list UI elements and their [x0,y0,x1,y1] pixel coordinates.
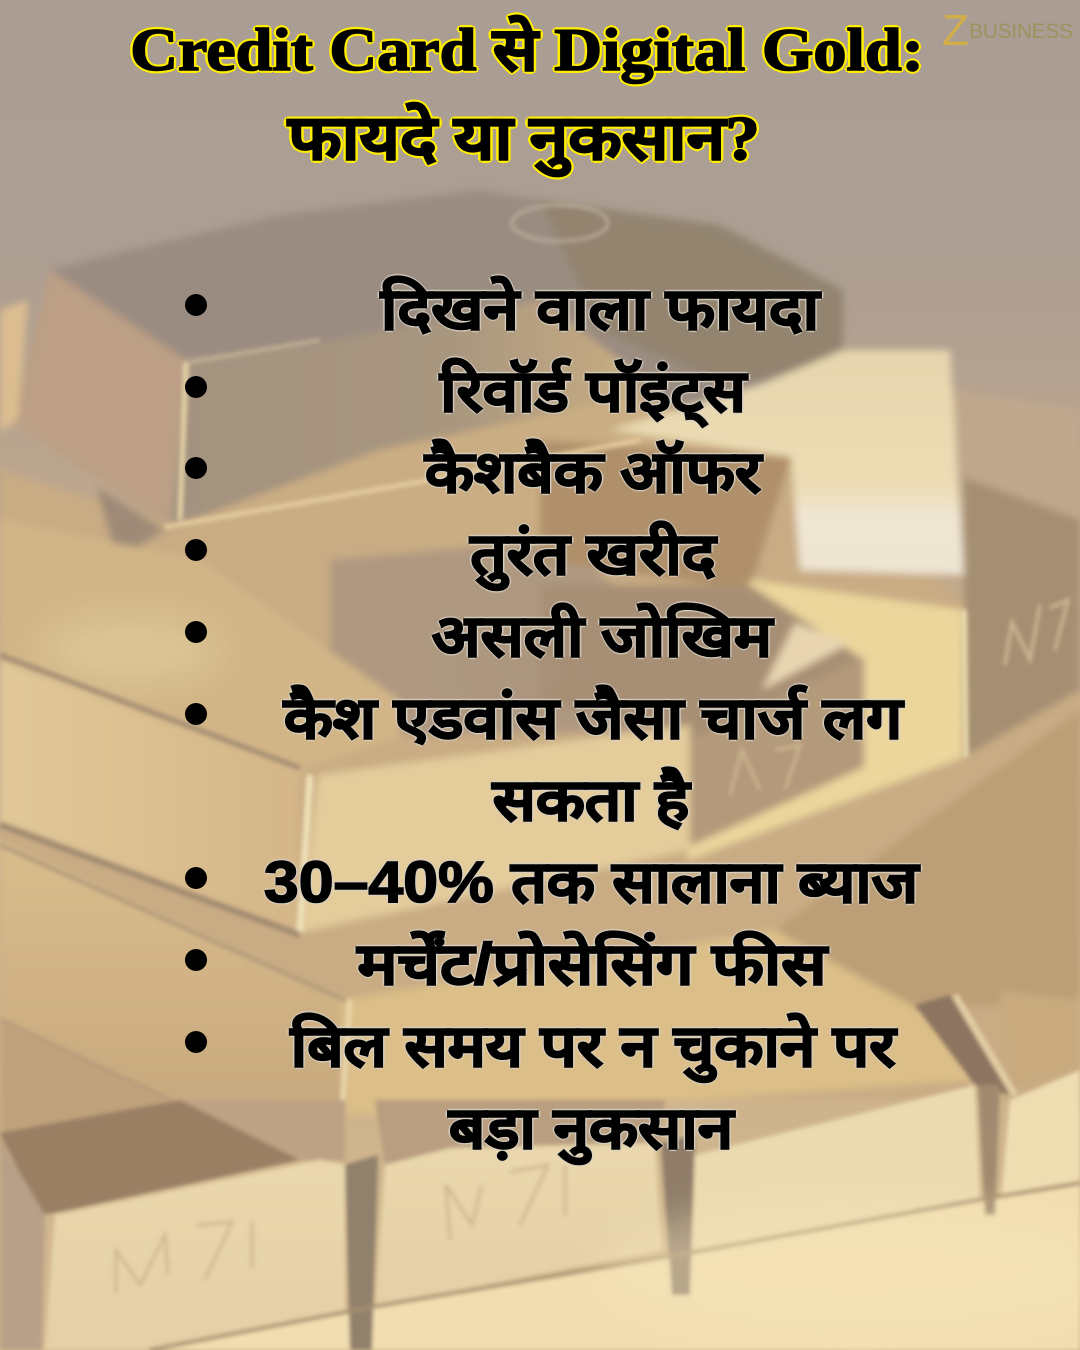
mid backdrop [0,450,1080,1100]
upper bar left end face [14,270,186,525]
bar B faces [0,660,300,932]
list line 9: बिल समय पर न चुकाने पर [291,1014,895,1079]
title: Credit Card से Digital Gold: [130,17,924,83]
bar C [0,842,340,1115]
engraved M71 marks [116,600,1068,1293]
floor [150,1183,1080,1350]
list line 7: 30–40% तक सालाना ब्याज [264,850,918,915]
ivory bar [610,350,964,575]
logo: Z Business: BUSINESS [969,20,1073,43]
coin-like engraved ring [512,205,608,241]
dark wedge lower right [915,995,1010,1095]
dark gaps [345,1155,378,1350]
bronze under ivory [540,440,791,590]
list line 6: कैश एडवांस जैसा चार्ज लग [284,686,902,751]
logo: Z Business: Z [942,6,969,55]
list line 8: मर्चेंट/प्रोसेसिंग फीस [357,932,826,997]
front row: tops [0,1100,300,1215]
logo: Z Business [942,6,1073,55]
list line 5: असली जोखिम [432,604,772,669]
upper bar right face [170,300,640,525]
front row: faces [45,1160,345,1350]
bar B top [0,520,400,770]
bullet list [263,274,922,1166]
title: फायदे या नुकसान? [288,105,760,173]
bullets [185,294,207,1053]
soft lights [600,1200,1080,1340]
list line 6 continued: सकता है [493,768,689,833]
list lines: दिखने वाला फायदा [381,277,819,342]
list line 9 continued: बड़ा नुकसान [449,1096,733,1161]
list line 2: रिवॉर्ड पॉइंट्स [440,359,746,424]
dark top of upper bar + gold bar [50,190,843,430]
title [130,12,924,180]
list line 4: तुरंत खरीद [470,522,716,587]
right upper surfaces [950,390,1080,520]
edge highlights [180,362,186,520]
list line 3: कैशबैक ऑफर [425,440,761,505]
